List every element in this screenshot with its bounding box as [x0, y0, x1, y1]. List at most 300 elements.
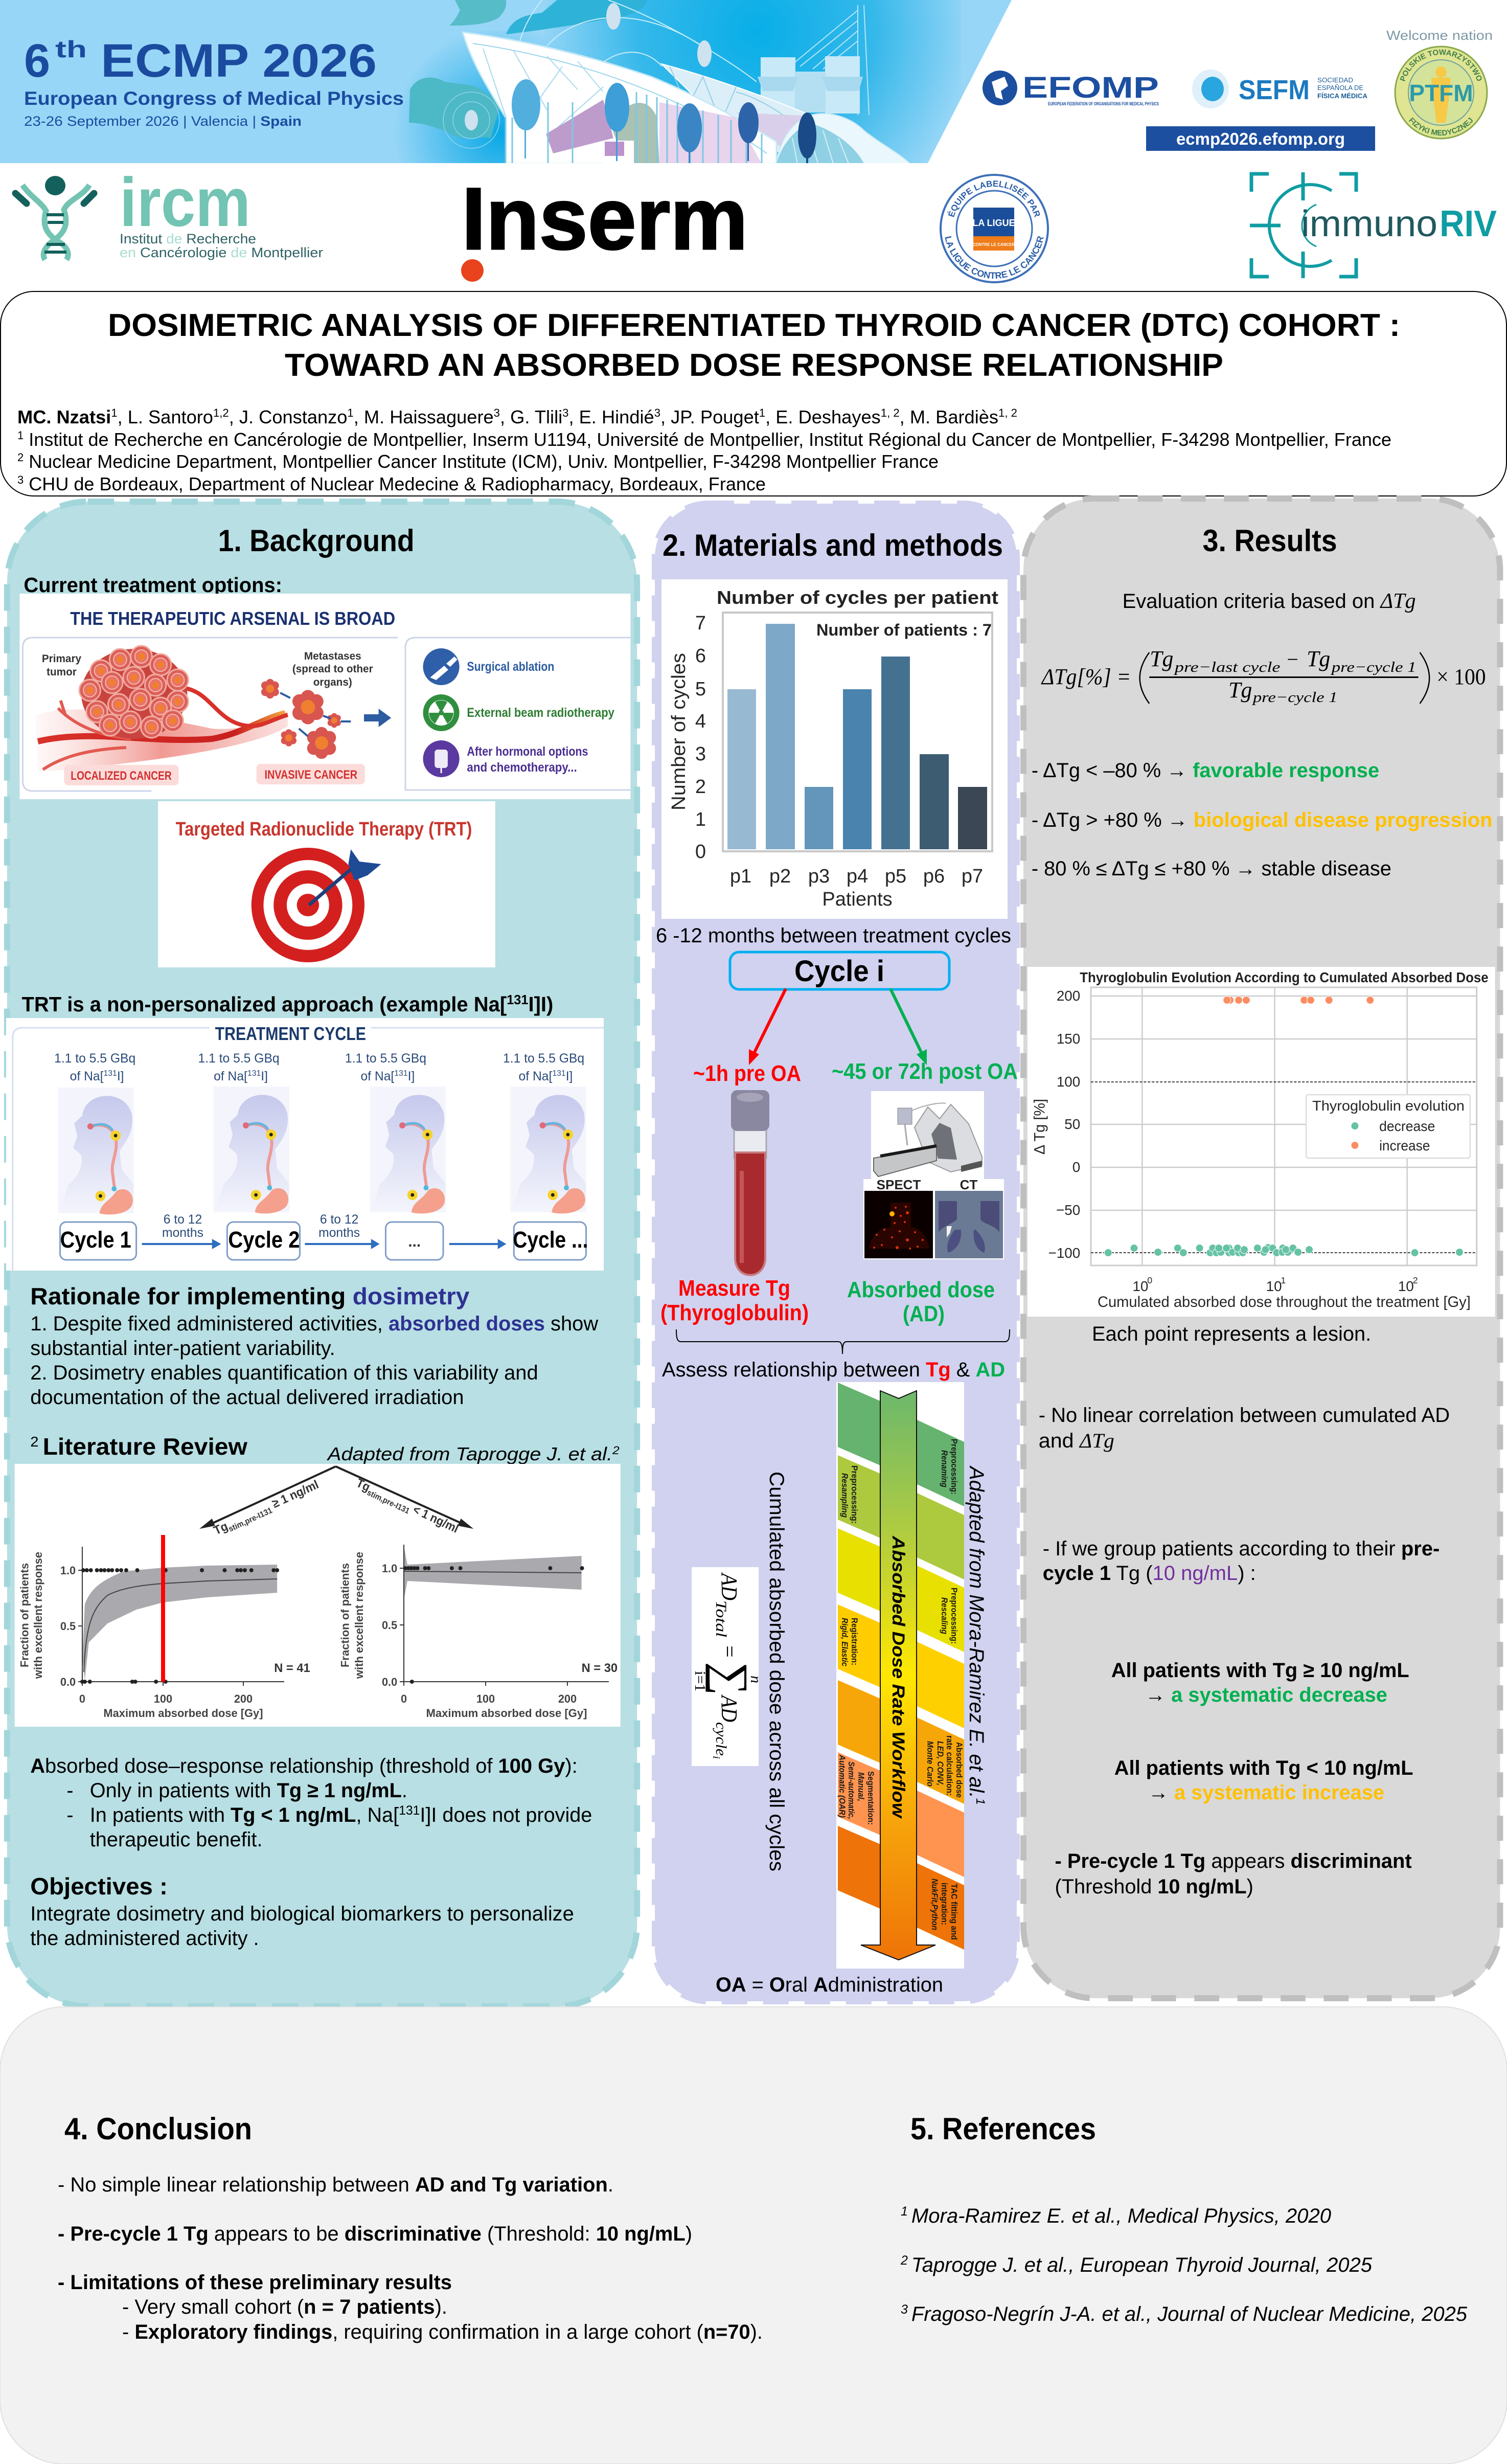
step labels: NukFit,Python: [930, 1879, 940, 1930]
x axis: p7: [962, 866, 983, 887]
icon: radiation: [423, 694, 460, 731]
logo: La Ligue: LA LIGUE CONTRE LE CANCER: [945, 236, 1044, 279]
subheading: TRT non personalized: I]I): [528, 992, 553, 1016]
source note: Adapted from Mora-Ramirez E. et al.: [965, 1466, 988, 1799]
subheading: current options: Current treatment options:: [24, 573, 282, 597]
y axis: Δ Tg [%]: [1032, 1099, 1048, 1155]
chart: Tg below 1: with excellent response: [353, 1552, 366, 1679]
heading: 1. Background: [218, 524, 415, 558]
text: absorbed dose: Absorbed dose: [847, 1277, 995, 1302]
chart: Tg below 1: N = 30: [582, 1661, 618, 1675]
x axis: [1098, 1275, 1471, 1310]
y axis: 3: [695, 743, 706, 765]
chart title: Thyroglobulin Evolution According to Cumulated Absorbed Dose: [1080, 969, 1489, 985]
text: references: 3: [901, 2302, 911, 2317]
x axis: 1: [1281, 1275, 1286, 1285]
icon: patient 3: [370, 1087, 446, 1213]
chart: Tg at least 1: Fraction of patients: [18, 1563, 31, 1667]
text: Tg at least 10: All patients with Tg ≥ 10 ng/mL: [1111, 1659, 1409, 1682]
y axis: 0: [695, 841, 706, 863]
text: dose-response findings: I]I does not provide: [420, 1804, 592, 1826]
towers: [758, 56, 863, 114]
text: conclusions: - Very small cohort (n = 7 patients).: [122, 2296, 447, 2318]
dose labels: 1.1 to 5.5 GBq: [54, 1052, 135, 1066]
chart: Tg below 1: 0.5: [382, 1619, 397, 1632]
icon: target: [252, 848, 381, 962]
icon: scalpel: [423, 648, 460, 685]
legend: increase: [1379, 1138, 1430, 1154]
text: Tg below 10: → a systematic increase: [1148, 1781, 1384, 1804]
chart: Tg below 1: 1.0: [382, 1562, 397, 1575]
text: references: Fragoso-Negrín J-A. et al., Journal of Nuclear Medicine, 2025: [911, 2303, 1468, 2325]
arrow label: Absorbed Dose Rate Workflow: [888, 1535, 908, 1819]
x axis: p5: [885, 866, 906, 887]
figure: absorbed dose rate workflow: [836, 1382, 964, 1969]
annotation: number of patients: Number of patients : 7: [816, 621, 992, 639]
y axis: 6: [695, 645, 706, 667]
y axis: Number of cycles: [668, 653, 690, 810]
logo: PTFM: POLSKIE TOWARZYSTWO: [1400, 49, 1481, 82]
step labels: Resampling: [840, 1473, 850, 1518]
authors: , JP. Pouget: [660, 406, 759, 427]
chart: Tg at least 1: 1.0: [60, 1564, 76, 1577]
cycle boxes: ...: [408, 1233, 421, 1250]
label: SPECT: SPECT: [877, 1177, 921, 1192]
x axis: p4: [847, 866, 868, 887]
formula: cumulated dose: =: [717, 1645, 741, 1658]
panel: materials and methods: [655, 504, 1018, 2001]
authors: , G. Tlili: [500, 406, 562, 427]
x axis: 0: [1147, 1275, 1152, 1285]
cycle boxes: Cycle 1: [60, 1228, 131, 1253]
authors: 1, 2: [881, 406, 900, 419]
bars: [727, 624, 987, 849]
heading: objectives: Objectives :: [30, 1873, 168, 1900]
arrows between cycles: [142, 1239, 506, 1249]
authors: , E. Hindié: [569, 406, 654, 427]
decrease points: [1104, 1244, 1463, 1257]
x axis: 10: [1132, 1278, 1148, 1294]
authors: 3: [562, 406, 569, 419]
interval labels: [162, 1213, 360, 1240]
chart: Tg below 1: Fraction of patients: [338, 1563, 351, 1667]
affiliations: 3: [17, 473, 24, 486]
text: Tg below 10: [1114, 1757, 1413, 1804]
text: assess relationship: Assess relationship between Tg & AD: [662, 1359, 1005, 1381]
step labels: Preprocessing:: [949, 1588, 959, 1644]
y axis: 200: [1057, 988, 1080, 1004]
subheading: TRT non personalized: TRT is a non-personalized approach (example Na[: [21, 992, 513, 1016]
formula: delta Tg: Tg: [1228, 678, 1252, 703]
text: dose-response findings: Only in patients with Tg ≥ 1 ng/mL.: [90, 1779, 407, 1802]
source note: 2: [612, 1444, 620, 1457]
text: response criteria: - 80 % ≤ ΔTg ≤ +80 % → stable disease: [1032, 857, 1391, 880]
x axis: Cumulated absorbed dose throughout the treatment [Gy]: [1098, 1294, 1471, 1310]
text: rationale points: documentation of the actual delivered irradiation: [30, 1386, 464, 1409]
authors: , M. Bardiès: [900, 406, 998, 427]
item: hormonal and chemo: After hormonal options: [467, 745, 588, 759]
text: rationale points: [30, 1313, 598, 1409]
y axis: −100: [1048, 1245, 1080, 1261]
logo: La Ligue: CONTRE LE CANCER: [973, 242, 1015, 247]
x axis: 10: [1398, 1278, 1414, 1294]
text: Tg at least 10: → a systematic decrease: [1145, 1684, 1387, 1706]
label: localized cancer: LOCALIZED CANCER: [71, 769, 172, 783]
dose labels: of Na[: [214, 1070, 247, 1083]
cycle boxes: Cycle 2: [228, 1228, 300, 1253]
logo: EFOMP: [983, 71, 1159, 106]
text: discriminant: [1055, 1850, 1412, 1898]
x axis: 10: [1266, 1278, 1282, 1294]
dose labels: of Na[: [360, 1070, 394, 1083]
workflow bands: [838, 1383, 964, 1950]
chart: Tg at least 1: [18, 1535, 310, 1720]
label: invasive cancer: INVASIVE CANCER: [264, 768, 357, 782]
text: references: Taprogge J. et al., European Thyroid Journal, 2025: [911, 2254, 1373, 2276]
text: rationale points: substantial inter-patient variability.: [30, 1337, 335, 1360]
dose labels: 131: [552, 1069, 566, 1078]
logo: immunoRIV: immuno: [1301, 204, 1437, 244]
chart: Tg at least 1: with excellent response: [32, 1552, 44, 1679]
heading: rationale: Rationale for implementing dosimetry: [30, 1283, 470, 1309]
logo: SEFM: SEFM: [1239, 75, 1310, 105]
dose labels: 131: [394, 1069, 408, 1078]
text: dose-response findings: therapeutic benefit.: [90, 1828, 263, 1851]
text: conclusions: - Pre-cycle 1 Tg appears to be discriminative (Threshold: 10 ng/mL): [58, 2223, 692, 2245]
step labels: Preprocessing:: [949, 1439, 959, 1495]
text: Tg below 10: All patients with Tg < 10 ng/mL: [1114, 1757, 1413, 1779]
text: response criteria: [1032, 759, 1493, 880]
legend: Thyroglobulin evolution: [1312, 1098, 1465, 1114]
chart: Tg below 1: 0: [401, 1692, 407, 1705]
text: no correlation: and ΔTg: [1039, 1429, 1114, 1452]
text: no correlation: [1039, 1404, 1450, 1452]
step labels: LED, CONV,: [935, 1741, 945, 1785]
authors: , M. Haissaguere: [354, 406, 494, 427]
text: response criteria: - ΔTg > +80 % → biological disease progression: [1032, 809, 1493, 831]
dose labels: 131: [247, 1069, 261, 1078]
authors: , L. Santoro: [118, 406, 213, 427]
formula: cumulated dose: [692, 1567, 764, 1766]
label: metastases: [292, 650, 373, 688]
dose labels: [54, 1052, 584, 1083]
image: SPECT: [864, 1191, 933, 1258]
chart: Tg at least 1: 0.5: [60, 1620, 76, 1633]
logo: Inserm: Inserm: [462, 170, 748, 268]
text: conclusions: - No simple linear relationship between AD and Tg variation.: [58, 2174, 613, 2196]
y axis: 4: [695, 711, 706, 732]
authors: 1: [111, 406, 118, 419]
formula: cumulated dose: i: [711, 1756, 722, 1759]
formula: cumulated dose: i=1: [692, 1671, 709, 1691]
arrow: to imaging: [890, 989, 927, 1065]
legend: decrease: [1379, 1118, 1435, 1134]
text: dose-response findings: [30, 1755, 592, 1851]
conference banner: [0, 0, 1493, 163]
interval labels: months: [162, 1226, 203, 1240]
label: metastases: (spread to other: [292, 663, 373, 675]
step labels: rate calculation:: [945, 1735, 954, 1796]
logo: IRCM: en Cancérologie de Montpellier: [120, 245, 323, 260]
label: primary tumor: [42, 653, 81, 678]
image: CT: [935, 1191, 1003, 1258]
heading: conclusion: 4. Conclusion: [64, 2112, 252, 2146]
logo: PTFM: [1386, 28, 1493, 139]
label: pre OA: ~1h pre OA: [693, 1061, 801, 1086]
chart: Tg below 1: 0.0: [382, 1676, 397, 1688]
y axis: 50: [1064, 1116, 1080, 1132]
x axis: Patients: [822, 889, 893, 910]
text: measure Tg: (Thyroglobulin): [660, 1300, 809, 1325]
label: invasive cancer: [257, 764, 365, 784]
map shapes: [449, 0, 506, 26]
note: each point: Each point represents a lesion.: [1092, 1323, 1371, 1345]
dose labels: of Na[: [519, 1070, 552, 1083]
formula: cumulated dose: cycle: [713, 1722, 729, 1754]
text: rationale points: 2. Dosimetry enables quantification of this variability and: [30, 1362, 538, 1384]
step labels: [837, 1439, 964, 1940]
formula: delta Tg: −: [1287, 648, 1298, 671]
label: CT: CT: [960, 1177, 977, 1192]
banner title: 6: [24, 35, 50, 87]
branching arrows: ≥ 1 ng/ml: [267, 1478, 321, 1512]
figure: treatment cycle: [6, 1018, 604, 1271]
cycle boxes: [60, 1222, 588, 1260]
authors: 3: [654, 406, 660, 419]
banner title: th: [55, 36, 87, 62]
building illustration: [463, 32, 813, 164]
formula: cumulated dose: Total: [713, 1600, 729, 1637]
chart: Tg at least 1: N = 41: [274, 1661, 310, 1675]
branching arrows: Tg: [212, 1519, 231, 1538]
text: objectives: the administered activity .: [30, 1927, 259, 1950]
panel: results: [1023, 499, 1500, 1998]
dome: [777, 114, 910, 164]
branching arrows: < 1 ng/ml: [408, 1501, 461, 1536]
title: [108, 308, 1400, 383]
box: cycle i: [730, 952, 949, 989]
logo: EFOMP: EUROPEAN FEDERATION OF ORGANISATIONS FOR MEDICAL PHYSICS: [1048, 101, 1159, 106]
dose labels: I]: [566, 1070, 573, 1083]
figure: SPECT/CT scanner: [863, 1091, 1004, 1259]
chart: Tg below 1: [338, 1545, 618, 1720]
step labels: Preprocessing:: [850, 1465, 859, 1524]
logo: La Ligue: ÉQUIPE LABELLISÉE PAR: [948, 180, 1040, 218]
cycle boxes: Cycle ...: [513, 1228, 588, 1253]
icon: patient 1: [58, 1088, 134, 1214]
y axis: −50: [1056, 1202, 1080, 1218]
text: Tg at least 10: [1111, 1659, 1409, 1706]
heading: 3. Results: [1203, 524, 1337, 558]
y axis: 1: [695, 809, 706, 830]
text: dose-response findings: -: [66, 1779, 74, 1802]
label: primary tumor: Primary: [42, 653, 81, 665]
chart: Tg at least 1: 0.0: [60, 1676, 76, 1688]
logo: immunoRIV: [1250, 172, 1497, 278]
authors: 1: [347, 406, 354, 419]
text: conclusions: - Exploratory findings, requiring confirmation in a large cohort (n=70).: [122, 2321, 763, 2343]
logo: La Ligue: LA LIGUE: [972, 218, 1015, 228]
figure: targeted radionuclide therapy: Targeted Radionuclide Therapy (TRT): [176, 819, 472, 840]
authors: MC. Nzatsi: [17, 406, 111, 427]
banner title: European Congress of Medical Physics: [24, 88, 404, 109]
step labels: Manual,: [856, 1772, 866, 1801]
text: grouping: [1043, 1538, 1440, 1585]
item: surgical ablation: Surgical ablation: [467, 660, 554, 674]
item: external beam: External beam radiotherapy: [467, 706, 614, 720]
text: dose-response findings: 131: [399, 1804, 420, 1818]
authors: , E. Deshayes: [765, 406, 881, 427]
formula: delta Tg: pre−cycle 1: [1330, 659, 1417, 675]
footnote: OA: OA = Oral Administration: [716, 1974, 943, 1996]
text: objectives: Integrate dosimetry and biological biomarkers to personalize: [30, 1903, 574, 1925]
affiliations: Nuclear Medicine Department, Montpellier Cancer Institute (ICM), Univ. Montpellier, F-34298 Montpellier France: [24, 451, 939, 472]
heading: 2. Materials and methods: [663, 528, 1003, 562]
banner title: [24, 35, 404, 129]
affiliations: [17, 429, 1391, 494]
dose labels: I]: [117, 1070, 124, 1083]
authors: 3: [494, 406, 500, 419]
formula: cumulated dose: AD: [717, 1572, 742, 1600]
logo: IRCM: Institut de Recherche: [120, 231, 256, 246]
title: TOWARD AN ABSORBED DOSE RESPONSE RELATIONSHIP: [285, 348, 1223, 383]
text: measure Tg: Measure Tg: [678, 1276, 790, 1301]
text: dose-response findings: -: [66, 1804, 74, 1826]
y axis: [1032, 988, 1080, 1261]
figure: literature dose response: [15, 1464, 621, 1727]
text: references: 2: [900, 2253, 911, 2268]
affiliations: Institut de Recherche en Cancérologie de Montpellier, Inserm U1194, Université de Montpellier, Institut Régional du Cancer de Montpellier, F-34298 Montpellier, France: [24, 429, 1391, 450]
formula: delta Tg: pre−last cycle: [1173, 659, 1281, 675]
branching arrows: stim,pre-I131: [227, 1506, 273, 1534]
text: discriminant: - Pre-cycle 1 Tg appears discriminant: [1055, 1850, 1412, 1872]
label: metastases: organs): [313, 676, 352, 688]
arrow: to blood sampling: [749, 989, 786, 1065]
panel: background: [6, 502, 637, 2006]
formula: delta Tg: Tg: [1307, 647, 1330, 671]
panel: conclusion and references: [0, 2007, 1507, 2464]
step labels: Automatic (OAR): [837, 1754, 847, 1818]
logo: SEFM: FÍSICA MÉDICA: [1317, 92, 1368, 100]
y axis: 7: [695, 613, 706, 634]
increase points: [1223, 996, 1374, 1004]
logo: SEFM: SOCIEDAD: [1317, 76, 1353, 84]
label: post OA: ~45 or 72h post OA: [832, 1059, 1018, 1084]
logo: immunoRIV: RIV: [1440, 204, 1497, 244]
text: grouping: - If we group patients according to their pre-: [1043, 1538, 1440, 1560]
workflow arrow: [861, 1391, 935, 1960]
route arcs: [519, 0, 757, 82]
text: dose-response findings: In patients with Tg < 1 ng/mL, Na[: [90, 1804, 399, 1826]
website tag: [1146, 126, 1375, 151]
banner title: ECMP 2026: [101, 35, 377, 87]
text: grouping: cycle 1 Tg (10 ng/mL) :: [1043, 1562, 1256, 1585]
step labels: Rescaling: [940, 1597, 949, 1635]
x axis: p1: [730, 866, 751, 887]
text: references: Mora-Ramirez E. et al., Medical Physics, 2020: [911, 2205, 1331, 2227]
chart: Tg at least 1: Maximum absorbed dose [Gy]: [103, 1707, 263, 1720]
text: evaluation criteria: Evaluation criteria based on ΔTg: [1123, 590, 1416, 613]
label: localized cancer: [64, 765, 179, 785]
x axis: p2: [769, 866, 791, 887]
x axis: 2: [1413, 1275, 1418, 1285]
icon: blood tube: [731, 1090, 769, 1275]
affiliations: 1: [17, 429, 24, 442]
text: cumulated absorbed dose: Cumulated absorbed dose across all cycles: [765, 1472, 788, 1871]
branching arrows: stim,pre-I131: [366, 1488, 411, 1516]
dose labels: 131: [103, 1069, 117, 1078]
chart: Tg at least 1: 100: [154, 1692, 172, 1705]
logo: PTFM: Welcome nation: [1386, 28, 1493, 43]
dose labels: I]: [408, 1070, 415, 1083]
logo: PTFM: FIZYKI MEDYCZNEJ: [1409, 118, 1473, 136]
trees: [512, 79, 816, 164]
heading: literature review: 2: [30, 1434, 43, 1450]
step labels: Rigid, Elastic: [840, 1618, 850, 1666]
dose labels: 1.1 to 5.5 GBq: [503, 1052, 584, 1066]
icon: patient 2: [214, 1087, 289, 1213]
text: discriminant: (Threshold 10 ng/mL): [1055, 1875, 1253, 1898]
text: absorbed dose: [847, 1277, 995, 1326]
text: dose-response findings: Absorbed dose–response relationship (threshold of 100 Gy):: [30, 1755, 578, 1777]
text: references: [900, 2204, 1468, 2325]
interval labels: 6 to 12: [164, 1213, 202, 1227]
branching arrows: Tg: [354, 1476, 373, 1495]
label: metastases: Metastases: [304, 650, 361, 662]
affiliations: CHU de Bordeaux, Department of Nuclear Medecine & Radiopharmacy, Bordeaux, France: [24, 473, 766, 494]
chart title: Number of cycles per patient: [717, 587, 998, 608]
step labels: TAC fitting and: [949, 1884, 959, 1940]
scatter chart: thyroglobulin evolution: [1028, 967, 1495, 1317]
chart: Tg below 1: Maximum absorbed dose [Gy]: [426, 1707, 587, 1720]
icon: patient 4: [510, 1087, 586, 1213]
panel: title: [1, 291, 1506, 496]
chart: Tg below 1: 200: [558, 1692, 577, 1705]
figure: targeted radionuclide therapy: [158, 801, 495, 967]
logo: PTFM: PTFM: [1409, 80, 1473, 106]
text: response criteria: - ΔTg < –80 % → favorable response: [1032, 759, 1379, 782]
figure: therapeutic arsenal: [20, 594, 630, 799]
formula: delta Tg: pre−cycle 1: [1251, 689, 1338, 706]
formula: delta Tg: Tg: [1150, 647, 1173, 671]
text: no correlation: - No linear correlation between cumulated AD: [1039, 1404, 1450, 1427]
step labels: Semi-automatic,: [847, 1761, 856, 1819]
step labels: integration:: [940, 1883, 949, 1925]
formula: delta Tg: × 100: [1436, 665, 1486, 689]
text: rationale points: 1. Despite fixed administered activities, absorbed doses show: [30, 1313, 598, 1335]
text: objectives: [30, 1903, 574, 1950]
label: primary tumor: tumor: [47, 666, 77, 678]
authors: 1,2: [213, 406, 229, 419]
text: interval between cycles: 6 -12 months between treatment cycles: [656, 924, 1011, 947]
y axis: 5: [695, 679, 706, 700]
dose labels: 1.1 to 5.5 GBq: [345, 1052, 426, 1066]
source note: Adapted from Taprogge J. et al.: [328, 1444, 581, 1464]
logo: IRCM: [15, 164, 323, 260]
logo: SEFM: ESPAÑOLA DE: [1317, 84, 1363, 92]
icon: IV bag: [423, 740, 460, 777]
branching arrows: [199, 1466, 473, 1540]
formula: delta Tg: [1041, 647, 1486, 706]
text: absorbed dose: (AD): [903, 1301, 945, 1326]
heading: references: 5. References: [910, 2112, 1096, 2146]
dose labels: I]: [261, 1070, 268, 1083]
website tag: ecmp2026.efomp.org: [1176, 129, 1345, 148]
brace: [676, 1329, 1010, 1354]
item: hormonal and chemo: [467, 745, 588, 775]
subheading: TRT non personalized: 131: [507, 993, 528, 1007]
authors: 1, 2: [998, 406, 1017, 419]
